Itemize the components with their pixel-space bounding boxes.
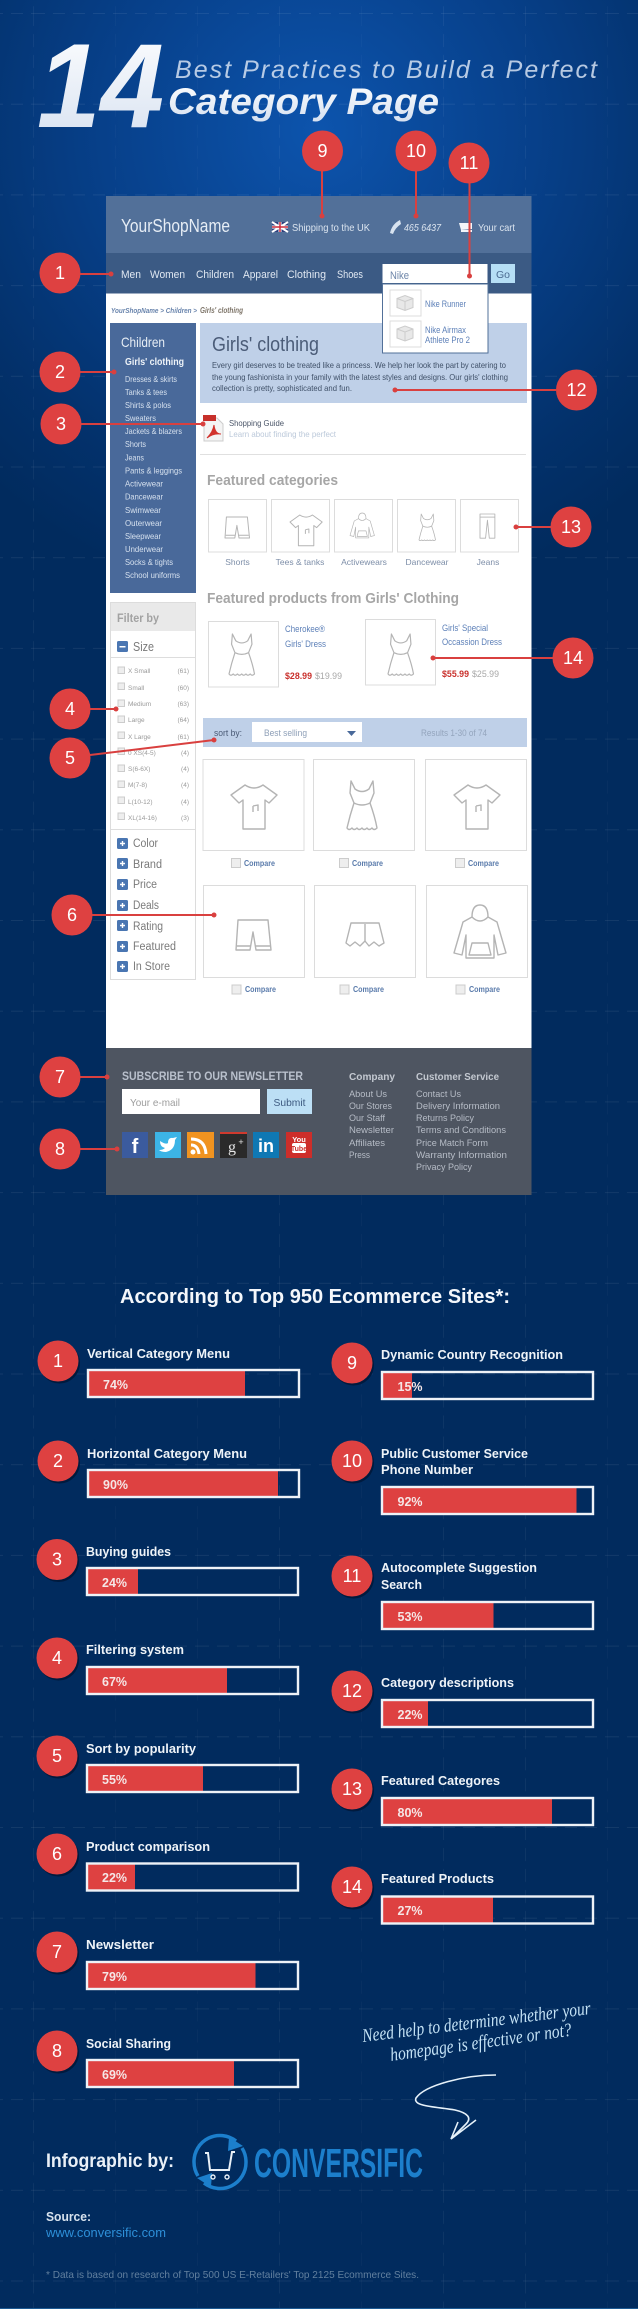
search box with autocomplete: Nike Runner [425, 299, 466, 310]
stat 3: buying guides [36, 1539, 298, 1595]
title: Best Practices to Build a Perfect [175, 56, 598, 84]
icon: cart [459, 223, 472, 232]
stat 13: featured categories: 13 [342, 1779, 362, 1799]
vertical category menu: Tanks & tees [125, 387, 167, 397]
icon: UK flag [272, 222, 288, 232]
callout 11 [448, 142, 490, 278]
stat 9: dynamic country recognition: 9 [347, 1353, 357, 1373]
product grid: Compare [469, 985, 500, 994]
stat 12: category descriptions: Category descriptions [381, 1676, 514, 1690]
stat 14: featured products: 14 [342, 1877, 362, 1897]
social icons [122, 1132, 312, 1158]
filter panel: Featured [133, 941, 176, 953]
vertical category menu: Sweaters [125, 413, 156, 423]
stat 14: featured products: Featured Products [381, 1872, 494, 1886]
filter panel: (63) [177, 701, 189, 708]
filter panel: Deals [133, 900, 159, 912]
filter panel: (4) [181, 782, 189, 789]
social icons: + [238, 1137, 244, 1147]
product grid: Compare [244, 859, 275, 868]
callout 7: 7 [55, 1067, 65, 1087]
stat 12: category descriptions: 22% [398, 1708, 422, 1722]
featured products: Girls' Special [442, 623, 488, 634]
stat 13: featured categories: Featured Categores [381, 1774, 500, 1788]
vertical category menu: Shirts & polos [125, 400, 171, 410]
featured products: $19.99 [315, 671, 342, 682]
featured products: $55.99 [442, 669, 469, 680]
callout 10 [396, 130, 436, 218]
stat 11: autocomplete suggestion search [332, 1556, 593, 1629]
filter panel: M(7-8) [128, 782, 147, 789]
source: www.conversific.com [45, 2225, 166, 2240]
callout 9: 9 [317, 141, 328, 161]
stat 4: filtering system [36, 1638, 298, 1694]
filter panel: Medium [128, 701, 151, 708]
filter panel: (3) [181, 815, 189, 822]
search box with autocomplete: Go [496, 269, 510, 281]
featured categories [207, 473, 518, 567]
horizontal category menu [106, 253, 532, 294]
callout 1 [40, 252, 114, 294]
stat 4: filtering system: 67% [102, 1675, 127, 1689]
stat 13: featured categories: 80% [398, 1806, 422, 1820]
filter panel: (4) [181, 750, 189, 757]
title: Category Page [168, 81, 439, 122]
filter panel: 0 XS(4-5) [128, 750, 156, 757]
stat 7: newsletter: 7 [52, 1942, 62, 1962]
horizontal category menu: Shoes [337, 269, 363, 281]
featured products: Cherokee® [285, 624, 325, 635]
callout 4 [50, 688, 118, 730]
product grid: Compare [352, 859, 383, 868]
stat 2: horizontal category menu [38, 1440, 299, 1497]
stat 3: buying guides: 3 [52, 1550, 62, 1570]
stat 7: newsletter [36, 1932, 298, 1989]
shopping guide [203, 415, 337, 441]
callout 13: 13 [561, 517, 581, 537]
filter panel: Size [133, 640, 154, 654]
vertical category menu: Socks & tights [125, 557, 173, 567]
stat 13: featured categories [332, 1768, 593, 1825]
site footer: SUBSCRIBE TO OUR NEWSLETTER [122, 1071, 304, 1083]
stat 14: featured products: 27% [398, 1904, 422, 1918]
filter panel: Filter by [117, 613, 160, 625]
stat 7: newsletter: Newsletter [86, 1938, 154, 1952]
vertical category menu: Girls' clothing [125, 356, 184, 368]
filter panel: Rating [133, 921, 163, 933]
title: 14 [37, 19, 164, 153]
filter panel: (60) [177, 685, 189, 692]
filter panel: (4) [181, 799, 189, 806]
vertical category menu: Swimwear [125, 505, 161, 515]
stat 8: social sharing [36, 2030, 298, 2087]
filter panel: (61) [177, 668, 189, 675]
filter panel: X Small [128, 668, 151, 675]
stat 1: vertical category menu [38, 1340, 299, 1397]
site footer: Company [349, 1072, 395, 1083]
filter panel: Brand [133, 859, 162, 871]
stat 5: sort by popularity: Sort by popularity [86, 1742, 196, 1756]
stat 5: sort by popularity: 5 [52, 1746, 62, 1766]
stat 12: category descriptions: 12 [342, 1681, 362, 1701]
site footer: Our Stores [349, 1101, 392, 1112]
filter panel: (4) [181, 766, 189, 773]
filter panel: Price [133, 879, 157, 891]
callout 6 [52, 894, 216, 936]
stat 2: horizontal category menu: 2 [53, 1451, 63, 1471]
featured categories: Featured categories [207, 473, 338, 489]
shop header bar: YourShopName [121, 216, 230, 236]
shopping guide: Shopping Guide [229, 418, 284, 428]
horizontal category menu: Men [121, 269, 141, 281]
filter panel: (61) [177, 734, 189, 741]
stat 7: newsletter: 79% [102, 1970, 127, 1984]
filter panel: X Large [128, 734, 151, 741]
stats heading: According to Top 950 Ecommerce Sites*: [120, 1286, 510, 1308]
category description: Every girl deserves to be treated like a princess. We help her look the part by catering to [212, 360, 506, 370]
featured products: $28.99 [285, 671, 312, 682]
category description: Girls' clothing [212, 334, 319, 356]
vertical category menu: School uniforms [125, 570, 180, 580]
horizontal category menu: Apparel [243, 269, 278, 281]
vertical category menu: Activewear [125, 478, 163, 488]
vertical category menu: Jackets & blazers [125, 426, 182, 436]
vertical category menu: Underwear [125, 544, 163, 554]
social icons: You [292, 1135, 306, 1144]
site footer: Contact Us [416, 1089, 461, 1100]
callout 6: 6 [67, 905, 77, 925]
stat 4: filtering system: Filtering system [86, 1643, 184, 1657]
social icons: f [132, 1136, 139, 1158]
stat 8: social sharing: 8 [52, 2041, 62, 2061]
footnote: * Data is based on research of Top 500 US E-Retailers' Top 2125 Ecommerce Sites. [46, 2269, 419, 2281]
stat 2: horizontal category menu: Horizontal Category Menu [87, 1447, 247, 1461]
product grid [203, 760, 528, 994]
stat 10: public customer service phone number: Phone Number [381, 1463, 473, 1477]
stat 12: category descriptions [332, 1670, 593, 1727]
site footer: Affiliates [349, 1138, 385, 1149]
stat 9: dynamic country recognition: Dynamic Country Recognition [381, 1348, 563, 1362]
callout 2: 2 [55, 362, 65, 382]
search box with autocomplete: Nike [390, 270, 409, 282]
shop header bar: Your cart [478, 222, 515, 234]
horizontal category menu: Children [196, 269, 234, 281]
site footer: Submit [274, 1097, 306, 1109]
credit: infographic by: CONVERSIFIC [254, 2140, 423, 2186]
search box with autocomplete: Nike Airmax [425, 325, 466, 336]
callout 8: 8 [55, 1139, 65, 1159]
product grid: Compare [245, 985, 276, 994]
sort bar: sort by: [214, 728, 242, 738]
stat 5: sort by popularity [36, 1736, 298, 1792]
horizontal category menu: Women [150, 269, 185, 281]
stat 10: public customer service phone number: Public Customer Service [381, 1447, 528, 1461]
shop header bar [106, 196, 532, 253]
site footer [106, 1048, 532, 1195]
credit: infographic by [46, 2135, 423, 2189]
stat 6: product comparison: Product comparison [86, 1840, 210, 1854]
stat 14: featured products [332, 1866, 593, 1924]
source [45, 2210, 166, 2240]
stat 6: product comparison: 22% [102, 1871, 127, 1885]
site footer: Returns Policy [416, 1113, 474, 1124]
callout 10: 10 [406, 141, 426, 161]
category description: the young fashionista in your family with the latest styles and designs. Our girls' clothing [212, 372, 508, 382]
stat 1: vertical category menu: 74% [103, 1378, 128, 1392]
callout 11: 11 [460, 153, 478, 173]
social icons: in [258, 1136, 274, 1156]
site footer: Press [349, 1150, 370, 1161]
site footer: Privacy Policy [416, 1162, 472, 1173]
icon: conversific logo [194, 2135, 246, 2189]
handwritten callout: homepage is effective or not? [389, 2020, 573, 2066]
stat 9: dynamic country recognition: 15% [398, 1380, 422, 1394]
credit: infographic by: Infographic by: [46, 2151, 174, 2172]
category description: collection is pretty, sophisticated and fun. [212, 383, 352, 393]
site footer: Newsletter [349, 1125, 394, 1136]
stat 11: autocomplete suggestion search: 53% [398, 1610, 422, 1624]
stat 1: vertical category menu: Vertical Category Menu [87, 1347, 230, 1361]
stat 10: public customer service phone number: 10 [342, 1451, 362, 1471]
callout 3: 3 [56, 414, 66, 434]
horizontal category menu: Clothing [287, 269, 326, 281]
site footer: Terms and Conditions [416, 1125, 506, 1136]
callout 14: 14 [563, 648, 583, 668]
sort bar: Results 1-30 of 74 [421, 728, 487, 738]
stat 8: social sharing: 69% [102, 2068, 127, 2082]
category description [200, 323, 527, 403]
filter panel: In Store [133, 961, 170, 973]
filter panel [110, 602, 196, 980]
callout 13 [514, 506, 592, 548]
callout 8 [40, 1128, 120, 1170]
shopping guide: Learn about finding the perfect [229, 429, 337, 439]
stat 11: autocomplete suggestion search: Search [381, 1578, 422, 1592]
stat 3: buying guides: 24% [102, 1576, 127, 1590]
title [37, 19, 598, 153]
callout 5 [50, 738, 216, 778]
stat 1: vertical category menu: 1 [53, 1351, 63, 1371]
sort bar [203, 718, 527, 747]
stat 2: horizontal category menu: 90% [103, 1478, 128, 1492]
filter panel: XL(14-16) [128, 815, 157, 822]
callout 14 [430, 638, 594, 678]
vertical category menu: Dancewear [125, 492, 163, 502]
stat 6: product comparison: 6 [52, 1844, 62, 1864]
shop header bar: 465 6437 [404, 222, 442, 234]
callout 12 [392, 370, 597, 410]
site footer: About Us [349, 1089, 387, 1100]
callout 9 [302, 130, 343, 218]
vertical category menu: Pants & leggings [125, 466, 182, 476]
site footer: Delivery Information [416, 1101, 500, 1112]
sort bar: Best selling [264, 728, 307, 738]
stat 10: public customer service phone number: 92% [398, 1495, 422, 1509]
featured categories: Shorts [225, 557, 250, 567]
product grid: Compare [468, 859, 499, 868]
featured products: Occassion Dress [442, 637, 502, 648]
stat 3: buying guides: Buying guides [86, 1545, 171, 1559]
filter panel: Color [133, 838, 158, 850]
search box with autocomplete: Athlete Pro 2 [425, 335, 470, 346]
featured products: Girls' Dress [285, 639, 326, 650]
stat 9: dynamic country recognition [332, 1342, 593, 1399]
filter panel: Small [128, 685, 145, 692]
featured categories: Dancewear [406, 557, 449, 567]
source: Source: [46, 2210, 91, 2224]
handwritten callout [360, 1998, 592, 2066]
vertical category menu: Children [121, 334, 165, 350]
site footer: Price Match Form [416, 1138, 488, 1149]
stat 4: filtering system: 4 [52, 1648, 62, 1668]
stat 11: autocomplete suggestion search: Autocomplete Suggestion [381, 1561, 537, 1575]
arrow [416, 2075, 496, 2139]
vertical category menu: Outerwear [125, 518, 162, 528]
callout 3 [40, 404, 206, 444]
vertical category menu: Sleepwear [125, 531, 161, 541]
callout 5: 5 [65, 748, 75, 768]
featured products: $25.99 [472, 669, 499, 680]
callout 1: 1 [55, 263, 65, 283]
filter panel: S(6-6X) [128, 766, 150, 773]
callout 4: 4 [65, 699, 75, 719]
social icons: g [228, 1139, 236, 1156]
stat 11: autocomplete suggestion search: 11 [343, 1566, 361, 1586]
icon: pdf [203, 415, 223, 441]
vertical category menu: Dresses & skirts [125, 374, 177, 384]
stat 8: social sharing: Social Sharing [86, 2037, 171, 2051]
featured products: Featured products from Girls' Clothing [207, 591, 459, 607]
search box with autocomplete [382, 264, 515, 353]
site footer: Customer Service [416, 1072, 499, 1083]
callout 2 [40, 352, 116, 392]
filter panel: L(10-12) [128, 799, 153, 806]
filter panel: (64) [177, 717, 189, 724]
site footer: Warranty Information [416, 1150, 507, 1161]
filter panel: Large [128, 717, 145, 724]
callout 7 [40, 1056, 110, 1098]
social icons: Tube [291, 1146, 307, 1153]
vertical category menu [110, 323, 196, 593]
shop header bar: Shipping to the UK [292, 222, 370, 234]
stat 5: sort by popularity: 55% [102, 1773, 127, 1787]
handwritten callout: Need help to determine whether your [360, 1998, 592, 2047]
icon: phone [390, 220, 401, 234]
featured categories: Activewears [341, 557, 387, 567]
panel: shop page mockup: Girls' clothing [200, 306, 243, 315]
featured products [207, 591, 502, 687]
featured categories: Jeans [477, 557, 499, 567]
breadcrumb: YourShopName > Children > [111, 306, 198, 315]
stat 6: product comparison [36, 1834, 298, 1890]
product grid: Compare [353, 985, 384, 994]
site footer: Our Staff [349, 1113, 385, 1124]
callout 12: 12 [566, 380, 587, 400]
vertical category menu: Jeans [125, 452, 144, 462]
vertical category menu: Shorts [125, 439, 146, 449]
featured categories: Tees & tanks [276, 557, 324, 567]
stat 10: public customer service phone number [332, 1440, 593, 1514]
site footer: Your e-mail [130, 1097, 180, 1109]
panel: shop page mockup [106, 196, 532, 1195]
